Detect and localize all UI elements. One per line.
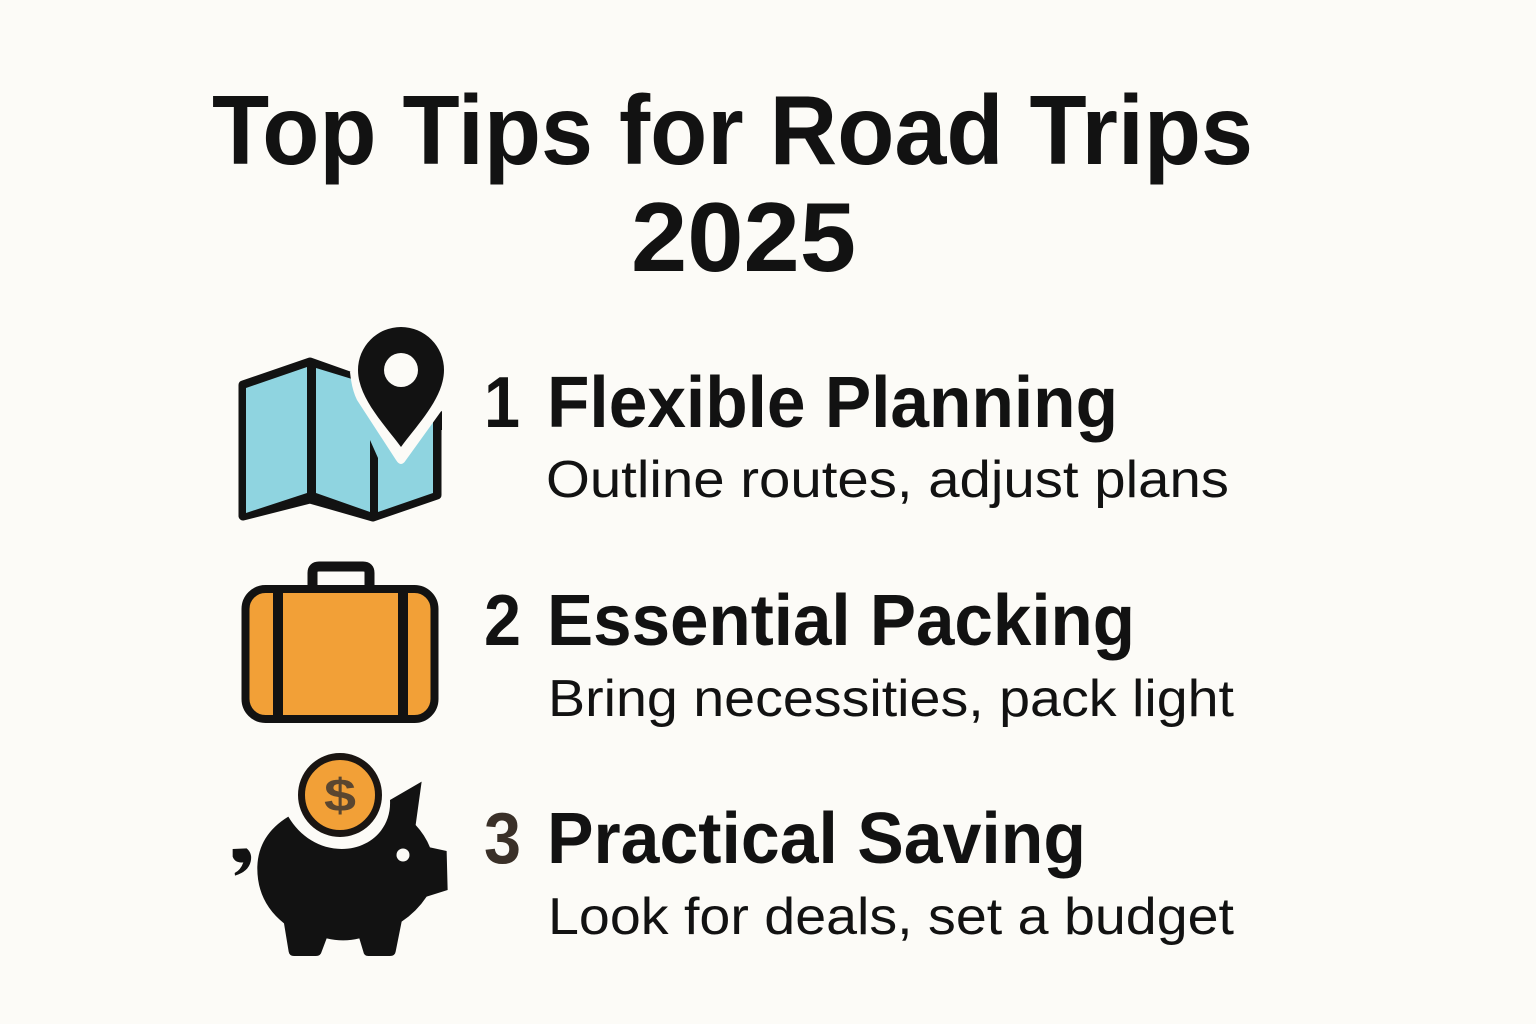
tip 1 text: Outline routes, adjust plans (546, 451, 1229, 509)
icon: suitcase (246, 566, 434, 719)
tip 2 text: 2 (484, 581, 521, 661)
icon: piggy bank with coin (233, 756, 448, 956)
tip 3 text: Look for deals, set a budget (548, 888, 1235, 946)
title: Top Tips for Road Trips (212, 75, 1253, 185)
tip 3 text (484, 799, 1235, 946)
tip 2 text (484, 581, 1235, 728)
title: 2025 (631, 182, 856, 292)
icon: piggy bank with coin: $ (324, 769, 356, 821)
icon: folded map with location pin (243, 320, 447, 517)
title (212, 75, 1253, 292)
tip 2 text: Essential Packing (547, 581, 1135, 661)
tip 2 text: Bring necessities, pack light (548, 670, 1235, 728)
tip 3 text: 3 (484, 799, 521, 879)
tip 1 text: 1 (484, 363, 520, 443)
tip 1 text (484, 363, 1229, 509)
tip 3 text: Practical Saving (547, 799, 1086, 879)
tip 1 text: Flexible Planning (547, 363, 1118, 443)
